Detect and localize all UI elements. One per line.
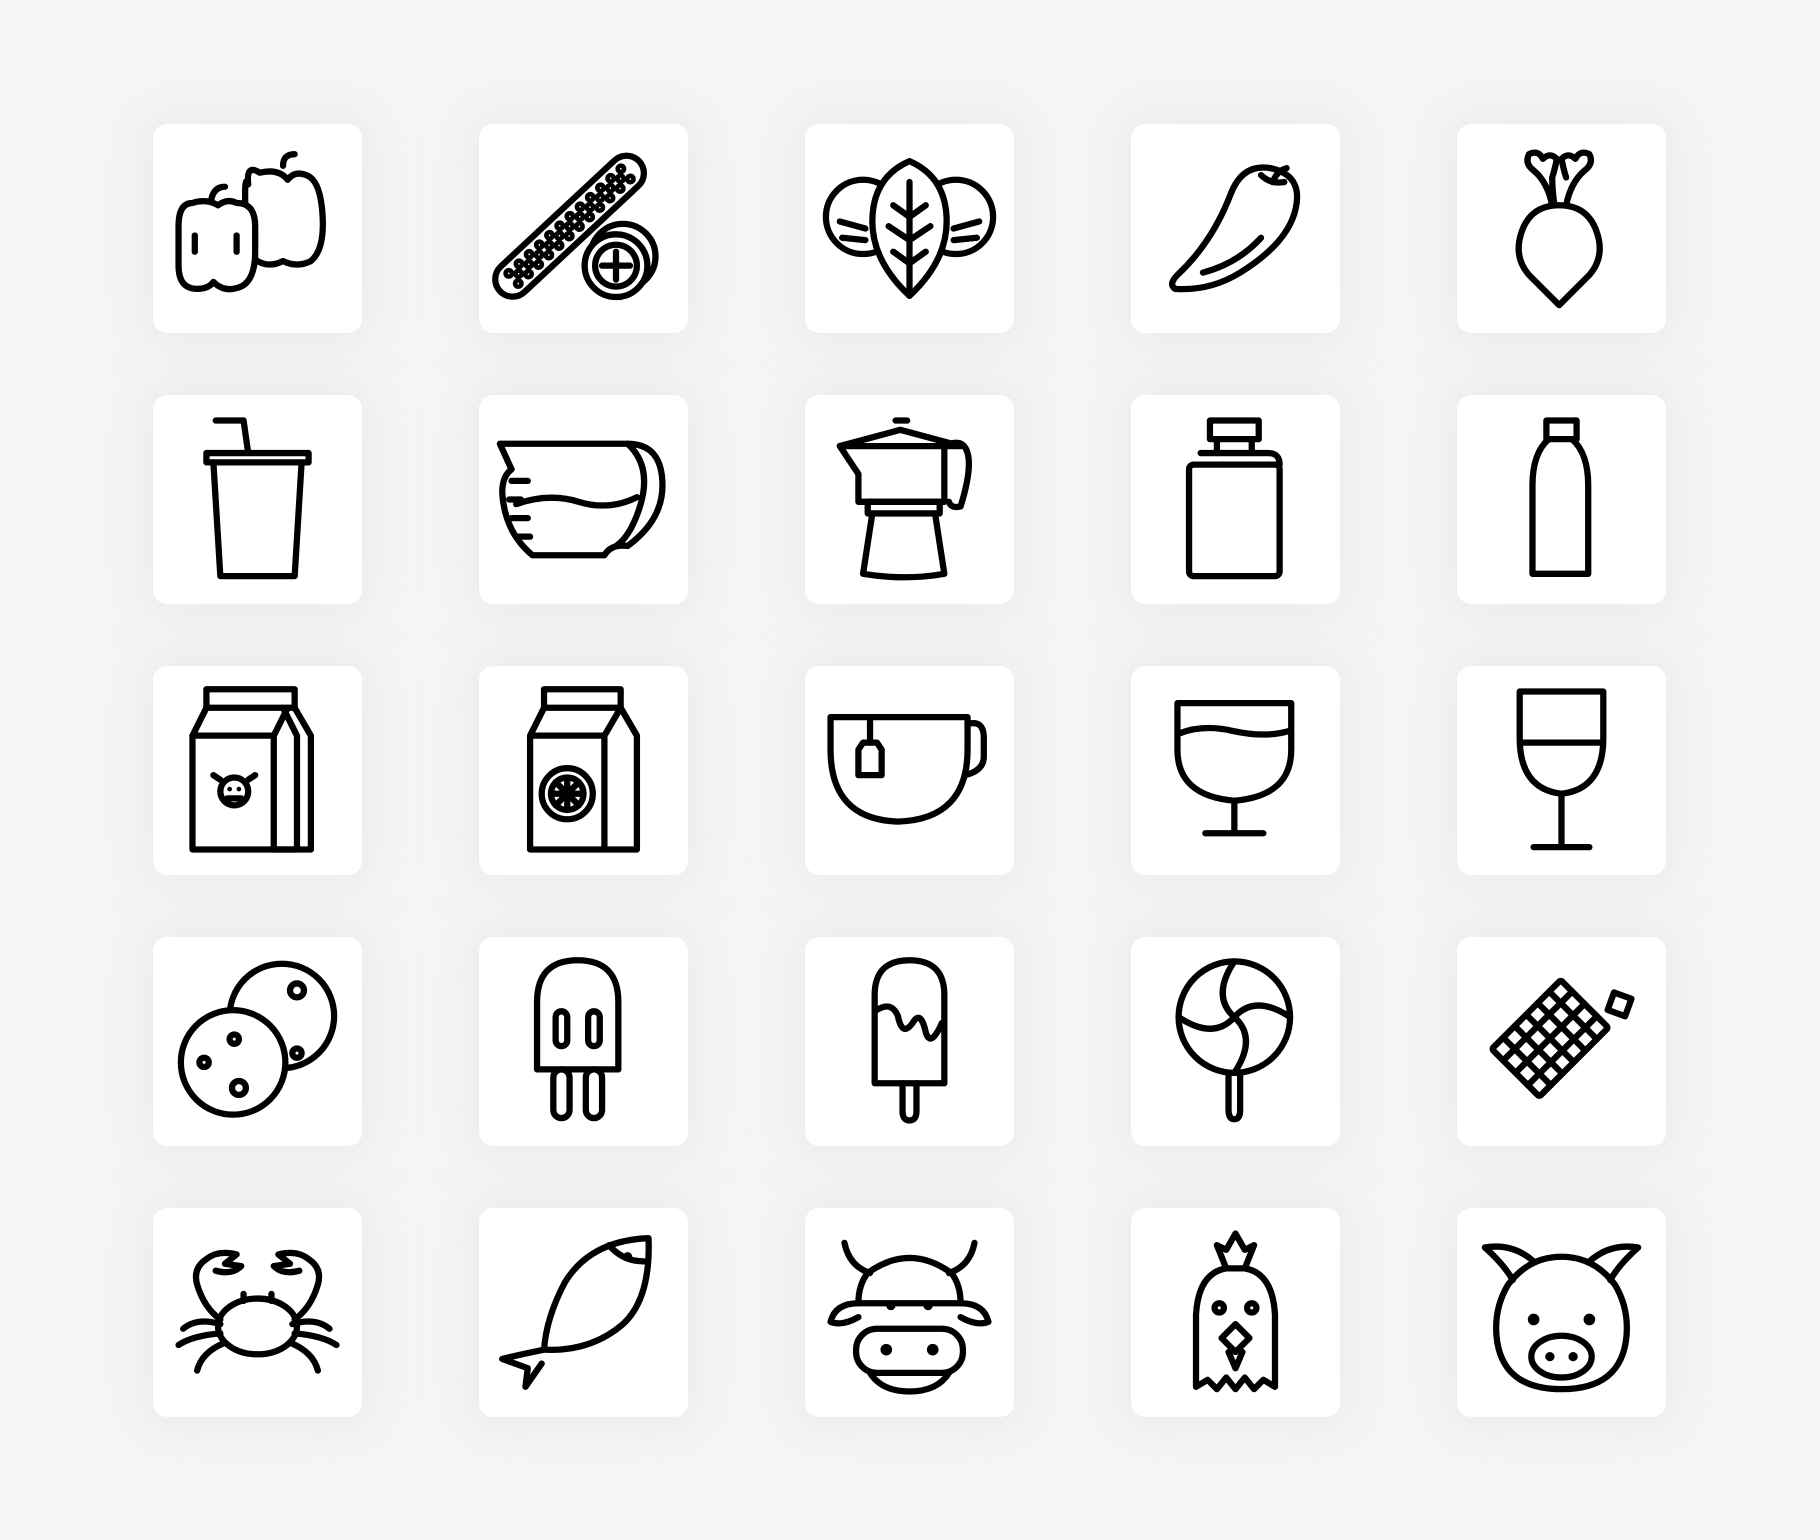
tile: double popsicle [479, 937, 688, 1146]
tile: measuring jug [479, 395, 688, 604]
tile: cookies [153, 937, 362, 1146]
tile: chicken [1131, 1208, 1340, 1417]
tile: pig [1457, 1208, 1666, 1417]
tile: juice carton [479, 666, 688, 875]
tile: moka pot [805, 395, 1014, 604]
tile: fish [479, 1208, 688, 1417]
tile: beet [1457, 124, 1666, 333]
tile: spinach [805, 124, 1014, 333]
tile: jar [1131, 395, 1340, 604]
tile: wine glass [1131, 666, 1340, 875]
tile: single popsicle [805, 937, 1014, 1146]
tile: cucumber [479, 124, 688, 333]
tile: crab [153, 1208, 362, 1417]
tile: chocolate bar [1457, 937, 1666, 1146]
tile: lollipop [1131, 937, 1340, 1146]
tile: cup with straw [153, 395, 362, 604]
tile: tall glass [1457, 666, 1666, 875]
tile: tea cup [805, 666, 1014, 875]
tile: cow [805, 1208, 1014, 1417]
tile: bell peppers [153, 124, 362, 333]
tile: chili pepper [1131, 124, 1340, 333]
tile: bottle [1457, 395, 1666, 604]
tile: milk carton [153, 666, 362, 875]
